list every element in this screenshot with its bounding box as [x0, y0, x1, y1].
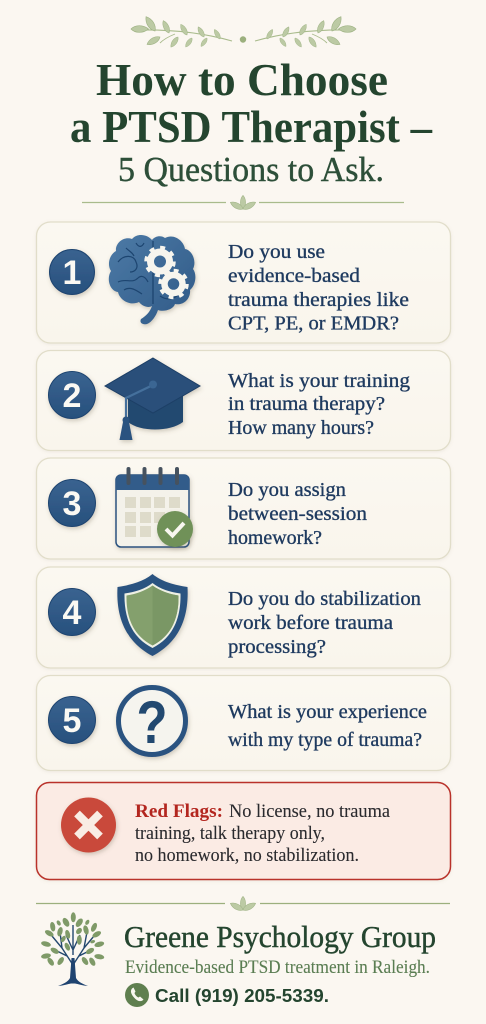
question 1 text [228, 241, 409, 334]
number badge 5: 5 [63, 702, 81, 740]
panel: question 4 [36, 567, 450, 668]
footer organisation name: Greene Psychology Group [124, 919, 436, 954]
question 2 text: in trauma therapy? [228, 393, 385, 415]
question 1 text: evidence-based [228, 265, 360, 287]
icon: tree logo [41, 912, 105, 986]
icon: graduation cap [105, 358, 200, 440]
number badge 4 [48, 588, 96, 636]
title [70, 54, 433, 189]
question 4 text: Do you do stabilization [228, 588, 421, 610]
number badge 1 [50, 250, 94, 294]
panel: question 1 [36, 222, 450, 343]
icon: calendar with check [116, 469, 193, 547]
question 3 text: homework? [228, 527, 322, 549]
title: a PTSD Therapist – [70, 101, 433, 152]
footer tagline: Evidence-based PTSD treatment in Raleigh. [125, 958, 430, 978]
number badge 3: 3 [63, 485, 81, 523]
question 4 text: work before trauma [228, 612, 393, 634]
number badge 1: 1 [63, 254, 81, 292]
question 3 text: Do you assign [228, 479, 346, 501]
title: How to Choose [96, 54, 388, 105]
number badge 2: 2 [63, 377, 81, 415]
question 2 text: What is your training [228, 370, 410, 392]
question 3 text [228, 479, 367, 549]
question 2 text: How many hours? [228, 417, 374, 439]
question 1 text: CPT, PE, or EMDR? [228, 312, 399, 334]
question 2 text [228, 370, 410, 439]
number badge 2 [48, 372, 96, 418]
question 3 text: between-session [228, 503, 367, 525]
panel: red flags [36, 782, 450, 880]
icon: phone [125, 983, 149, 1007]
question 1 text: trauma therapies like [228, 289, 409, 311]
red flags text: Red Flags: [135, 801, 223, 822]
icon: top laurel ornament [131, 15, 356, 48]
icon: question mark [118, 688, 186, 756]
number badge 3 [48, 480, 96, 526]
red flags text: No license, no trauma [229, 801, 391, 822]
footer divider with leaf [36, 896, 450, 912]
red flags text: training, talk therapy only, [135, 823, 325, 844]
question 4 text [228, 588, 421, 658]
call to action phone number: Call (919) 205-5339. [155, 986, 329, 1006]
icon: shield [117, 574, 188, 656]
icon: question mark: ? [136, 689, 168, 756]
question 4 text: processing? [228, 636, 326, 658]
title divider with leaf [82, 195, 404, 211]
title: 5 Questions to Ask. [118, 150, 384, 189]
question 1 text: Do you use [228, 241, 325, 263]
number badge 5 [48, 696, 96, 744]
icon: red X [61, 798, 116, 852]
question 5 text [228, 701, 427, 751]
icon: brain with gears [109, 235, 195, 324]
panel: question 3 [36, 458, 450, 559]
red flags text [135, 801, 391, 866]
panel: question 2 [36, 350, 450, 450]
question 5 text: with my type of trauma? [228, 729, 422, 751]
red flags text: no homework, no stabilization. [135, 845, 359, 866]
number badge 4: 4 [63, 594, 82, 632]
panel: question 5 [36, 676, 450, 770]
question 5 text: What is your experience [228, 701, 427, 723]
